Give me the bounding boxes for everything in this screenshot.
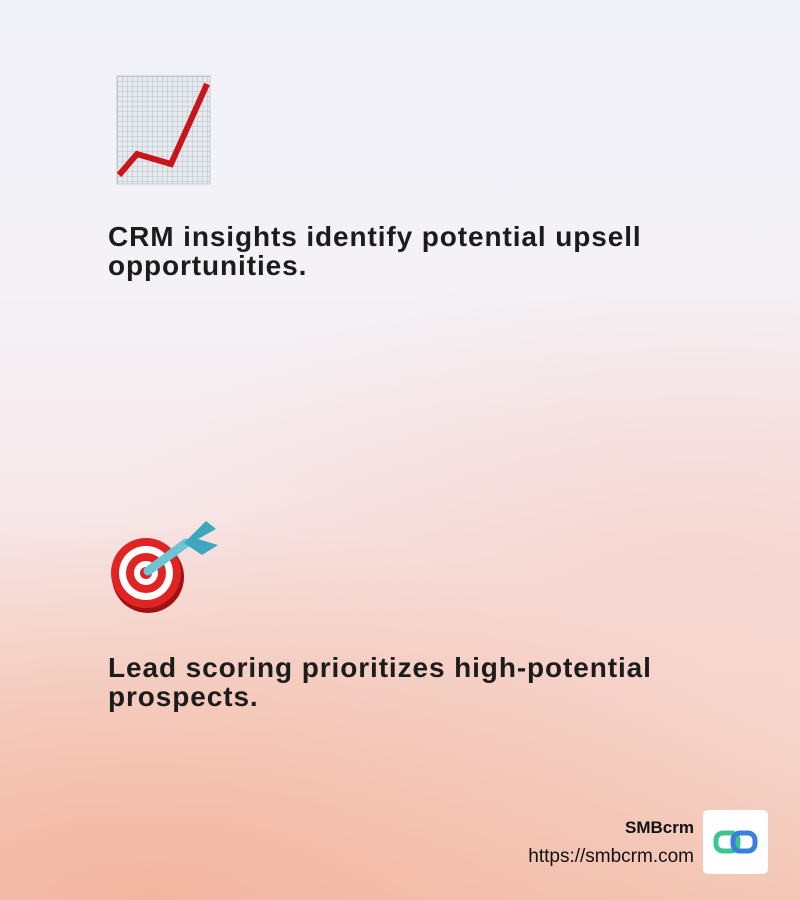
text block: lead scoring: Lead scoring prioritizes high-potential — [108, 652, 652, 683]
brand name: SMBcrm — [625, 818, 694, 837]
text block: lead scoring: prospects. — [108, 681, 259, 712]
icon: chart increasing — [116, 76, 210, 184]
text block: upsell: opportunities. — [108, 250, 307, 281]
text block: upsell — [108, 221, 642, 281]
logo — [703, 810, 768, 874]
icon: target with dart — [111, 521, 218, 613]
text block: upsell: CRM insights identify potential upsell — [108, 221, 642, 252]
brand url: https://smbcrm.com — [528, 846, 694, 867]
text block: lead scoring — [108, 652, 652, 712]
